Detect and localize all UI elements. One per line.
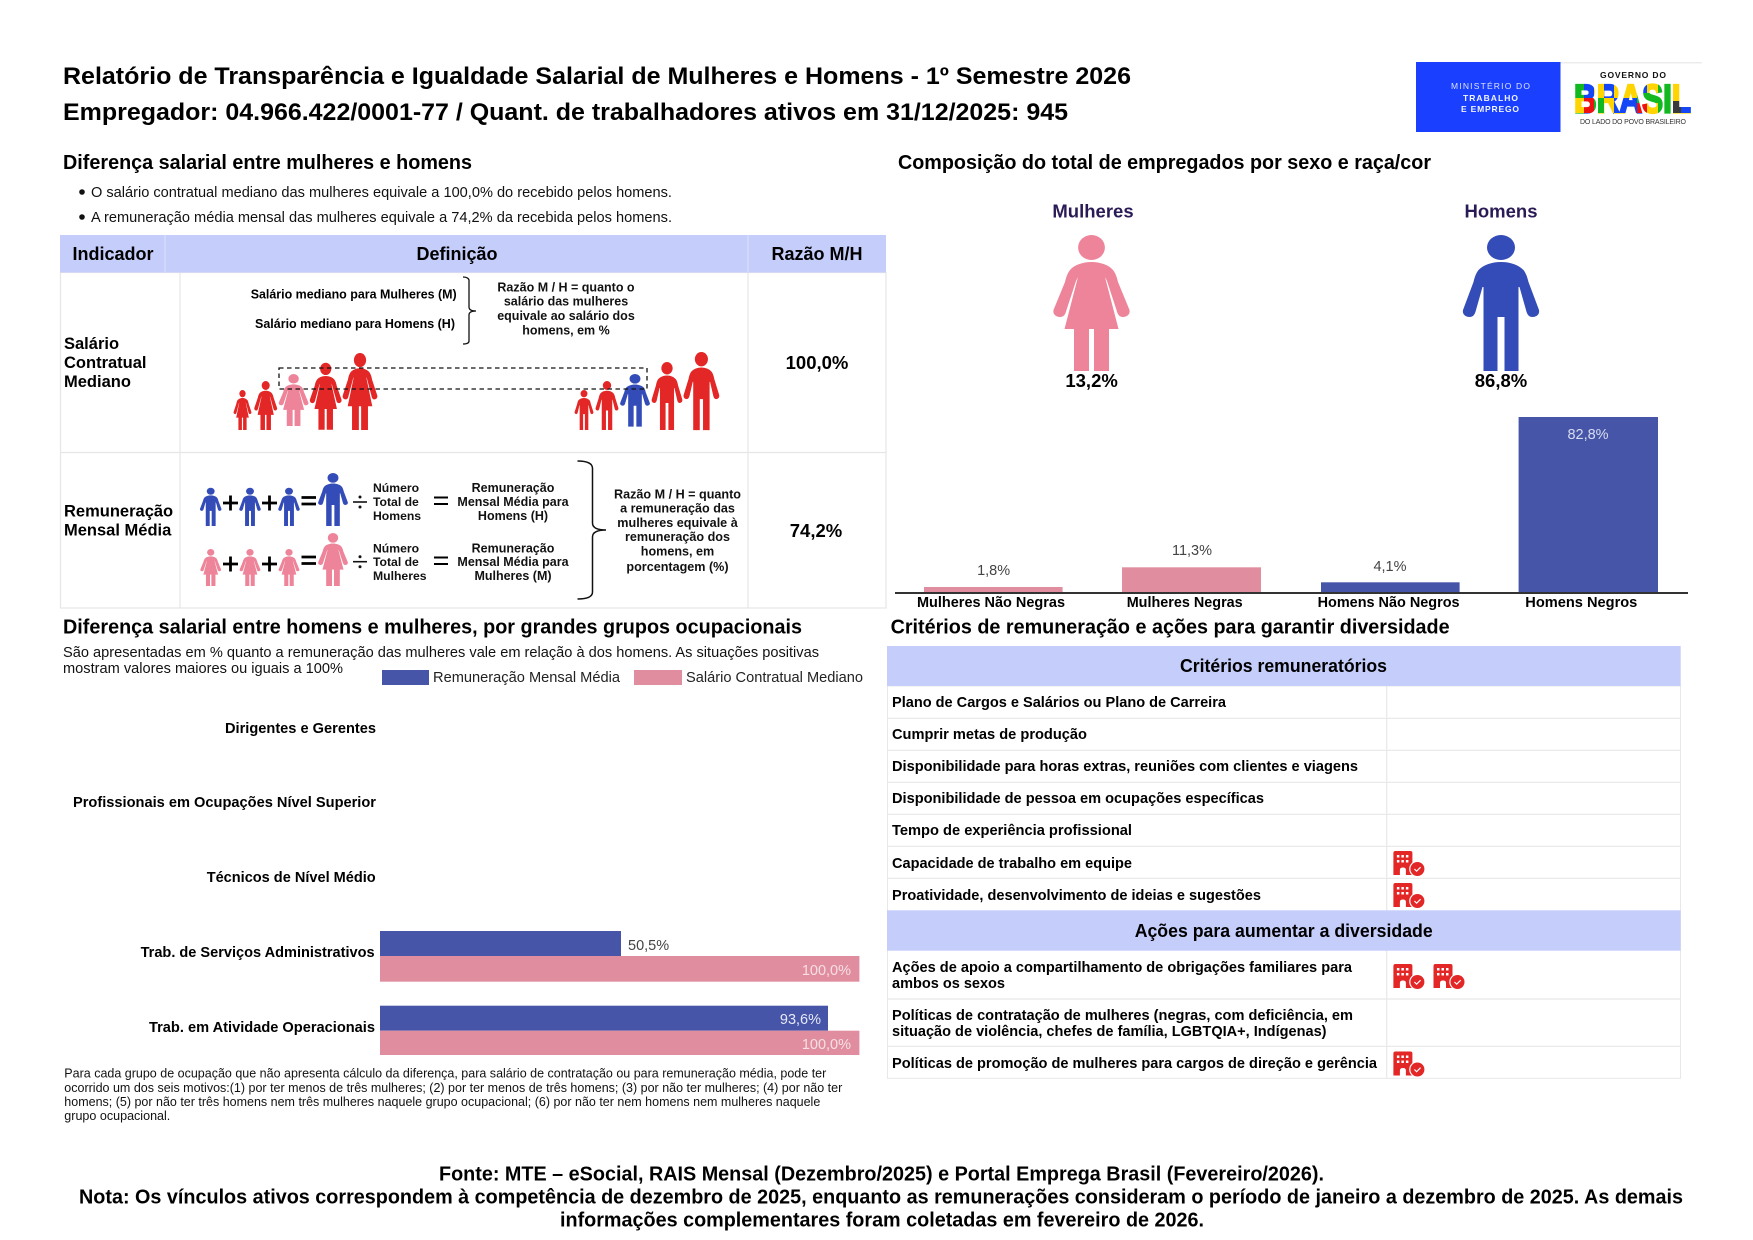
footer: fonte e nota bbox=[79, 1164, 1683, 1232]
logo: Ministério do Trabalho e Governo do Brasil: DO LADO DO POVO BRASILEIRO bbox=[1580, 119, 1687, 126]
brace and ratio definition: Razão M / H = quanto bbox=[614, 488, 741, 502]
fórmula: homens: Total de bbox=[373, 495, 419, 509]
table header: critérios remuneratórios bbox=[887, 646, 1681, 686]
bar chart: sexo e raça/cor: 4,1% bbox=[1373, 559, 1407, 575]
footer: fonte e nota: Fonte: MTE – eSocial, RAIS Mensal (Dezembro/2025) e Portal Emprega Brasil (Fevereiro/2026). bbox=[439, 1164, 1324, 1186]
row label: remuneração mensal média: Mensal Média bbox=[64, 522, 172, 540]
actions rows: situação de violência, chefes de família, LGBTQIA+, Indígenas) bbox=[892, 1023, 1327, 1040]
row label: remuneração mensal média: Remuneração bbox=[64, 502, 173, 520]
bar chart: trab. em atividade operacionais: 100,0% bbox=[802, 1037, 851, 1053]
definição mediana: texto: Salário mediano para Mulheres (M) bbox=[251, 288, 457, 302]
panel: composição por sexo e raça/cor bbox=[895, 151, 1688, 611]
icons: mulheres em ordem de salário bbox=[234, 353, 377, 430]
fórmula: mulheres: Remuneração bbox=[472, 542, 555, 556]
actions rows: Ações de apoio a compartilhamento de obrigações familiares para bbox=[892, 959, 1353, 976]
label: mulheres: Mulheres bbox=[1052, 200, 1134, 222]
value: 100,0%: 100,0% bbox=[786, 352, 848, 373]
brace and ratio definition: a remuneração das bbox=[620, 502, 735, 516]
fórmula: homens bbox=[200, 473, 570, 526]
icon: mulher bbox=[1053, 235, 1130, 371]
criteria rows: Plano de Cargos e Salários ou Plano de Carreira bbox=[892, 694, 1227, 711]
explanatory text: mostram valores maiores ou iguais a 100% bbox=[63, 661, 343, 677]
explanatory text bbox=[63, 645, 819, 677]
category labels: Trab. em Atividade Operacionais bbox=[149, 1019, 375, 1036]
logo: Ministério do Trabalho e Governo do Brasil: TRABALHO bbox=[1463, 93, 1518, 103]
icons: homens em ordem de salário bbox=[575, 352, 719, 430]
bar chart: trab. de serviços administrativos: 100,0% bbox=[802, 963, 851, 979]
page title: Empregador: 04.966.422/0001-77 / Quant. de trabalhadores ativos em 31/12/2025: 945 bbox=[63, 99, 1068, 126]
label: homens: Homens bbox=[1464, 200, 1538, 222]
brace and ratio definition: mulheres equivale à bbox=[617, 516, 739, 530]
bullet list: A remuneração média mensal das mulheres equivale a 74,2% da recebida pelos homens. bbox=[91, 210, 672, 226]
row label: salário contratual mediano bbox=[64, 335, 146, 391]
fórmula: mulheres: Mulheres bbox=[373, 569, 427, 583]
icon: empresa ações 2 bbox=[1434, 964, 1466, 990]
table header: ações para aumentar a diversidade bbox=[887, 910, 1681, 951]
actions rows: Políticas de promoção de mulheres para cargos de direção e gerência bbox=[892, 1055, 1378, 1072]
icon: empresa proatividade bbox=[1393, 883, 1426, 909]
brace and ratio definition: homens, em bbox=[641, 544, 714, 558]
row label: salário contratual mediano: Salário bbox=[64, 335, 119, 353]
table header: ações para aumentar a diversidade: Ações para aumentar a diversidade bbox=[1135, 920, 1433, 941]
logo: Ministério do Trabalho e Governo do Brasil: MINISTÉRIO DO bbox=[1451, 81, 1530, 91]
footer: fonte e nota: Nota: Os vínculos ativos correspondem à competência de dezembro de 2025, enquanto as remunerações consideram o período de janeiro a dezembro de 2025. As demais bbox=[79, 1186, 1683, 1208]
category labels: Técnicos de Nível Médio bbox=[207, 869, 376, 886]
table: indicadores bbox=[60, 235, 886, 608]
bar chart: sexo e raça/cor bbox=[895, 417, 1688, 611]
definição mediana: texto: Razão M / H = quanto o bbox=[497, 280, 635, 294]
bar chart: trab. de serviços administrativos: 50,5% bbox=[628, 938, 669, 954]
actions rows: Políticas de contratação de mulheres (negras, com deficiência, em bbox=[892, 1007, 1353, 1024]
row label: remuneração mensal média bbox=[64, 502, 173, 540]
table: indicadores: Definição bbox=[416, 244, 498, 264]
bar chart: sexo e raça/cor: 82,8% bbox=[1567, 427, 1609, 443]
icon: empresa capacidade bbox=[1393, 851, 1426, 877]
fórmula: homens: Homens (H) bbox=[478, 509, 548, 523]
panel: critérios de remuneração e ações bbox=[887, 616, 1681, 1078]
fórmula: mulheres: Mensal Média para bbox=[457, 555, 570, 569]
bar chart: sexo e raça/cor: 1,8% bbox=[977, 563, 1010, 579]
bar chart: sexo e raça/cor: Homens Negros bbox=[1525, 594, 1637, 611]
bullet list bbox=[79, 185, 672, 226]
fórmula: homens: Homens bbox=[373, 509, 421, 523]
category labels: Trab. de Serviços Administrativos bbox=[141, 944, 375, 961]
heading: composição: Composição do total de empregados por sexo e raça/cor bbox=[898, 151, 1431, 174]
fórmula: mulheres: Mulheres (M) bbox=[474, 569, 552, 583]
value: 13,2%: 13,2% bbox=[1065, 370, 1118, 391]
logo: Ministério do Trabalho e Governo do Brasil: BRASIL bbox=[1574, 78, 1691, 122]
icon: empresa promoção bbox=[1393, 1052, 1426, 1078]
fórmula: mulheres bbox=[200, 533, 570, 586]
legend: Salário Contratual Mediano bbox=[686, 670, 863, 686]
table: indicadores: Indicador bbox=[72, 244, 154, 264]
bar chart: sexo e raça/cor: Mulheres Não Negras bbox=[917, 594, 1065, 611]
dashed highlight box bbox=[279, 368, 647, 389]
table header: critérios remuneratórios: Critérios remuneratórios bbox=[1180, 655, 1387, 676]
criteria rows: Proatividade, desenvolvimento de ideias e sugestões bbox=[892, 887, 1261, 904]
bar chart: sexo e raça/cor: Mulheres Negras bbox=[1127, 594, 1243, 611]
bar chart: trab. de serviços administrativos bbox=[380, 931, 859, 982]
value: 86,8%: 86,8% bbox=[1475, 370, 1527, 391]
bar chart: sexo e raça/cor: Homens Não Negros bbox=[1318, 594, 1460, 611]
brace and ratio definition: porcentagem (%) bbox=[626, 560, 729, 574]
panel: diferença por grandes grupos ocupacionais bbox=[63, 616, 863, 1123]
heading: diferença salarial: Diferença salarial entre mulheres e homens bbox=[63, 151, 472, 174]
value: 74,2%: 74,2% bbox=[790, 520, 842, 541]
fórmula: mulheres: Número bbox=[373, 542, 419, 556]
criteria rows: Cumprir metas de produção bbox=[892, 726, 1087, 743]
footnote: grupo ocupacional. bbox=[64, 1108, 170, 1123]
fórmula: homens: Remuneração bbox=[472, 481, 555, 495]
footnote: Para cada grupo de ocupação que não apresenta cálculo da diferença, para salário de contratação ou para remuneração média, pode ter bbox=[64, 1066, 827, 1080]
definição mediana: texto: Salário mediano para Homens (H) bbox=[255, 317, 455, 331]
definição mediana: texto: equivale ao salário dos bbox=[497, 309, 635, 323]
criteria rows: Disponibilidade para horas extras, reuniões com clientes e viagens bbox=[892, 758, 1358, 775]
icon: homem bbox=[1463, 235, 1539, 371]
actions rows: ambos os sexos bbox=[892, 975, 1005, 992]
row label: salário contratual mediano: Mediano bbox=[64, 373, 131, 391]
panel: diferença salarial entre mulheres e homens bbox=[60, 151, 886, 608]
category labels: Dirigentes e Gerentes bbox=[225, 720, 376, 737]
logo: Ministério do Trabalho e Governo do Brasil: E EMPREGO bbox=[1461, 104, 1519, 114]
table: indicadores: Razão M/H bbox=[771, 244, 863, 264]
fórmula: homens: Mensal Média para bbox=[457, 495, 570, 509]
category labels bbox=[73, 720, 376, 1036]
bullet list: O salário contratual mediano das mulheres equivale a 100,0% do recebido pelos homens. bbox=[91, 185, 672, 201]
fórmula: mulheres: Total de bbox=[373, 555, 419, 569]
footnote: ocorrido um dos seis motivos:(1) por ter menos de três mulheres; (2) por ter menos de três homens; (3) por não ter mulheres; (4) por não ter bbox=[64, 1080, 843, 1095]
explanatory text: São apresentadas em % quanto a remuneração das mulheres vale em relação à dos homens. As situações positivas bbox=[63, 645, 819, 661]
heading: grupos ocupacionais: Diferença salarial entre homens e mulheres, por grandes grupos ocupacionais bbox=[63, 616, 802, 638]
footnote bbox=[64, 1066, 843, 1123]
icon: empresa ações 1 bbox=[1393, 964, 1426, 990]
criteria rows bbox=[892, 694, 1358, 904]
table grid bbox=[887, 686, 1681, 1078]
row label: salário contratual mediano: Contratual bbox=[64, 354, 146, 372]
definição mediana: texto bbox=[251, 277, 635, 344]
definição mediana: texto: salário das mulheres bbox=[504, 294, 628, 308]
bar chart: trab. em atividade operacionais: 93,6% bbox=[780, 1012, 821, 1028]
actions rows bbox=[892, 959, 1378, 1072]
page title: Relatório de Transparência e Igualdade Salarial de Mulheres e Homens - 1º Semestre 2026 bbox=[63, 63, 1131, 90]
legend bbox=[382, 670, 863, 686]
heading: critérios: Critérios de remuneração e ações para garantir diversidade bbox=[891, 616, 1450, 638]
bar chart: trab. em atividade operacionais bbox=[380, 1006, 859, 1055]
definição mediana: texto: homens, em % bbox=[522, 324, 610, 338]
legend: Remuneração Mensal Média bbox=[433, 670, 621, 686]
category labels: Profissionais em Ocupações Nível Superior bbox=[73, 794, 376, 811]
brace and ratio definition bbox=[578, 461, 741, 599]
page title bbox=[63, 63, 1131, 126]
footnote: homens; (5) por não ter três homens nem três mulheres naquele grupo ocupacional; (6) por não ter nem homens nem mulheres naquele bbox=[64, 1094, 820, 1109]
criteria rows: Capacidade de trabalho em equipe bbox=[892, 855, 1132, 872]
bar chart: sexo e raça/cor: 11,3% bbox=[1172, 543, 1212, 559]
logo: Ministério do Trabalho e Governo do Brasil: GOVERNO DO bbox=[1600, 70, 1666, 80]
footer: fonte e nota: informações complementares foram coletadas em fevereiro de 2026. bbox=[560, 1210, 1204, 1232]
criteria rows: Tempo de experiência profissional bbox=[892, 822, 1132, 839]
brace and ratio definition: remuneração dos bbox=[625, 530, 730, 544]
criteria rows: Disponibilidade de pessoa em ocupações específicas bbox=[892, 790, 1264, 807]
logo: Ministério do Trabalho e Governo do Brasil bbox=[1416, 62, 1702, 132]
fórmula: homens: Número bbox=[373, 481, 419, 495]
